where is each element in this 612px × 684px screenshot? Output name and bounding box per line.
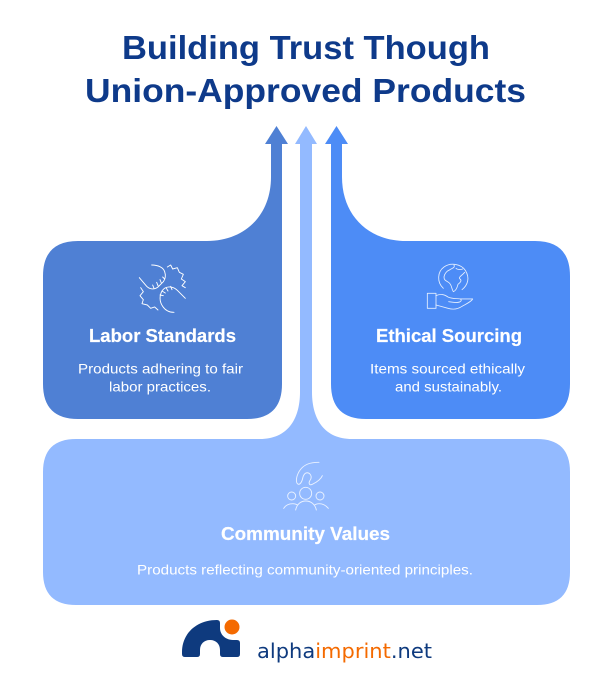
- description: ethical sourcing: and sustainably.: [395, 378, 502, 394]
- panel: ethical sourcing: [325, 126, 570, 419]
- title: [85, 29, 526, 109]
- description: ethical sourcing: [370, 360, 525, 394]
- description: community values: Products reflecting community-oriented principles.: [137, 562, 473, 578]
- logo: [182, 620, 432, 663]
- description: labor standards: Products adhering to fair: [78, 360, 243, 376]
- title: Building Trust Though: [122, 29, 490, 66]
- heading: labor standards: Labor Standards: [89, 325, 236, 346]
- logo wordmark: alphaimprint.net: [257, 639, 432, 663]
- icon: globe in hand: [427, 264, 473, 309]
- heading: community values: Community Values: [221, 523, 390, 544]
- shape: labor standards panel with arrow: [43, 126, 288, 419]
- panel: labor standards: [43, 126, 288, 419]
- shape: community values panel with arrow: [43, 126, 570, 605]
- description: labor standards: labor practices.: [109, 378, 211, 394]
- logo mark: [182, 620, 240, 657]
- icon: shaking hands: [139, 265, 185, 312]
- description: ethical sourcing: Items sourced ethically: [370, 360, 525, 376]
- logo dot: [224, 620, 240, 634]
- heading: ethical sourcing: Ethical Sourcing: [376, 325, 522, 346]
- panel: community values: [43, 126, 570, 605]
- icon: community: [284, 462, 328, 510]
- shape: ethical sourcing panel with arrow: [325, 126, 570, 419]
- title: Union-Approved Products: [85, 72, 526, 109]
- description: labor standards: [78, 360, 243, 394]
